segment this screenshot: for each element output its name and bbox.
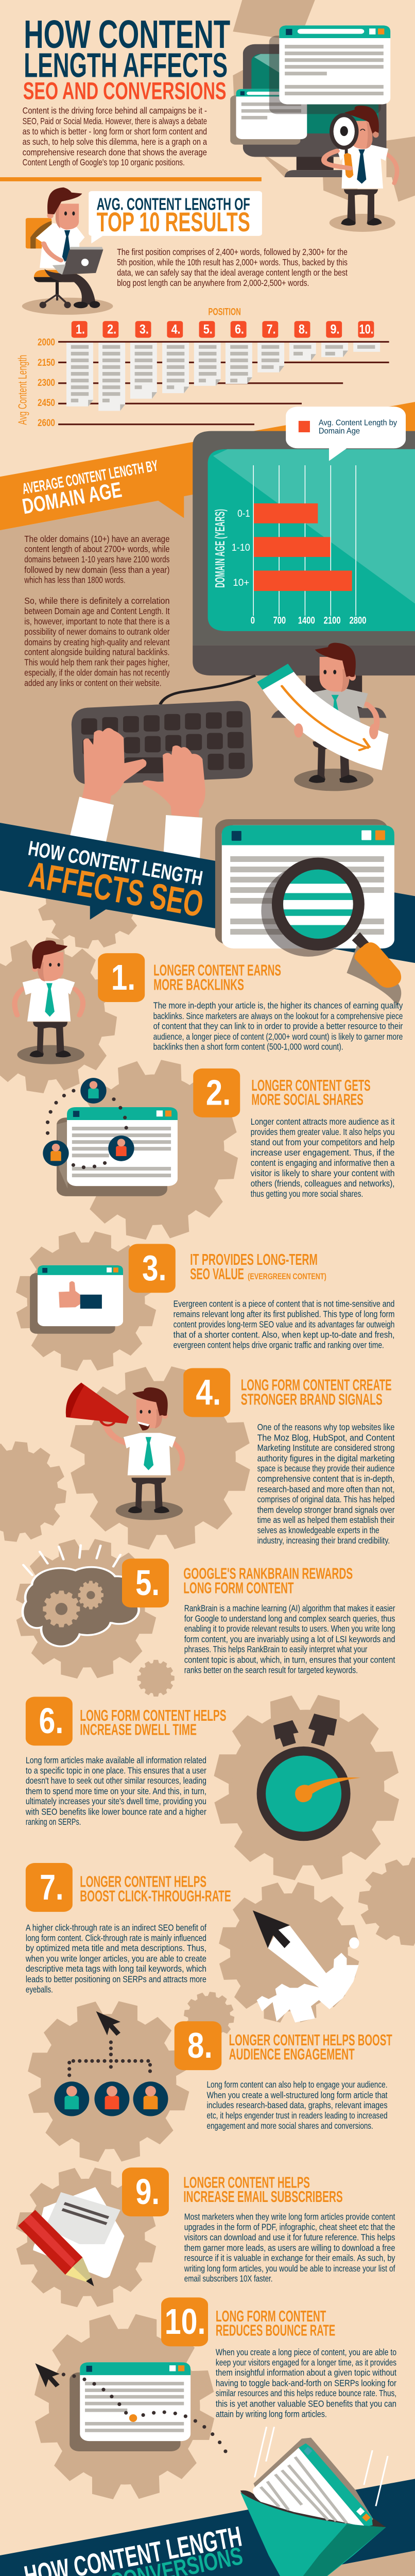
text 3 [174,1299,394,1350]
text 6 [25,1755,206,1827]
speech bubble heading: TOP 10 RESULTS [97,207,250,237]
domain age text: content alongside building natural backlinks. [24,647,169,657]
domain age bar chart: 1-10 [232,542,250,553]
domain age bar chart [232,465,366,626]
title: HOW CONTENT [24,12,230,56]
standing man [15,940,84,1064]
domain age text: domains by creating high-quality and relevant [24,637,170,648]
section: SEO items 6 and 7: BOOST CLICK-THROUGH-RATE [80,1888,231,1905]
intro text: Content is the driving force behind all campaigns be it - [23,106,207,116]
text 7: when you write longer articles, you are able to create [25,1954,206,1964]
text 4 [257,1422,395,1546]
item 1 [98,953,403,1052]
man holding scroll with arrow [257,643,389,791]
item 3 illustration: thumbs up window [30,1265,123,1334]
item 2 [193,1069,395,1199]
item 3 [129,1244,394,1350]
domain age bar chart: 0-1 [237,508,250,519]
item 2 illustration: shared window [43,1078,178,1196]
text 2 [251,1117,395,1199]
heading 5 [183,1565,353,1597]
badge 9 [122,2167,169,2216]
intro text: SEO, Paid or Social Media. However, there is always a debate [23,116,207,126]
heading: how content length affects SEO: HOW CONTENT LENGTH [26,837,204,890]
text 7 [25,1923,206,1995]
chart axis labels: 2300 [38,377,55,388]
intro text [23,106,207,167]
gear behind cursor [204,1867,374,2038]
domain age bar chart: 0 [251,615,255,626]
badge 5 [122,1558,169,1607]
chart axis labels [38,336,55,429]
text 6: Long form articles make available all information related [26,1755,206,1766]
envelope and pencil [18,2187,125,2286]
man with magnifying glass [324,106,397,232]
position badges: 5. [203,323,213,337]
chart axis labels: 2450 [38,397,55,408]
domain age text: possibility of newer domains to outrank older [24,627,170,637]
chart y axis label: Avg Content Length [15,355,29,425]
man with laptop on chair [22,188,113,315]
heading 5: LONG FORM CONTENT [183,1580,294,1597]
item 1: LONGER CONTENT EARNS [153,962,281,979]
heading: average content length by domain age: AVERAGE CONTENT LENGTH BY [21,457,159,498]
item 7 [25,1863,231,1995]
position badges: 9. [331,323,340,337]
gear behind megaphone man [51,1347,269,1569]
tan background band [0,453,415,897]
intro text: comprehensive research done that shows the average [23,147,207,158]
badge 4: 4. [196,1372,221,1413]
section: keyboard and SEO banner [0,643,415,1006]
speech bubble heading: AVG. CONTENT LENGTH OF [97,195,250,214]
gear left [0,1437,71,1547]
chart grid lines [58,341,389,425]
navy banner [0,2479,415,2576]
gear behind item 3 [1,1216,171,1386]
text 7: by optimized meta title and meta descriptions. Thus, [26,1943,206,1954]
item 5 [122,1558,395,1675]
heading 1: MORE BACKLINKS [153,976,244,993]
section: SEO items 6 and 7 [25,1660,415,2038]
badge 3 [129,1244,176,1293]
domain age bar chart: 10+ [233,577,249,588]
domain age text [24,534,170,688]
item 4 [183,1368,395,1546]
text 7: long form content. Click-through rate is mainly influenced [26,1933,206,1943]
position badges: 3. [140,323,149,337]
badge 1: 1. [111,958,135,997]
heading 4 [241,1377,392,1408]
position badges [72,321,374,338]
heading 3: SEO VALUE [190,1265,244,1283]
text 6: with SEO benefits like lower bounce rate and a higher [25,1807,206,1817]
badge 6: 6. [39,1701,63,1741]
badge 2 [193,1069,240,1117]
audience tree [54,2011,168,2116]
heading: how content length affects SEO: AFFECTS SEO [26,854,206,925]
chart axis labels: 2000 [38,336,55,348]
badge 8 [175,2021,221,2070]
text 6: to a specific topic in one place. This ensures that a user [26,1766,206,1776]
badge 8: 8. [187,2026,213,2066]
gear behind envelope [1,2153,171,2322]
bounce window [35,2362,228,2453]
badge 4 [183,1368,230,1417]
text 7: descriptive meta tags with long tail keywords, which [26,1964,206,1974]
gear behind man [0,928,126,1103]
heading 7 [80,1873,231,1905]
heading: how content length affects SEO [26,837,206,925]
heading: average content length by domain age: DOMAIN AGE [21,477,124,518]
heading: how content length affects conversions [21,2520,245,2576]
title: SEO AND CONVERSIONS [23,77,226,105]
text 9 [184,2212,395,2284]
legend bubble: Domain Age [319,426,360,435]
item 8 [175,2021,392,2131]
badge 7 [26,1863,73,1912]
domain age bar chart: 700 [273,615,286,626]
badge 2: 2. [206,1073,231,1113]
section: SEO items 4 and 5 [0,1347,395,1693]
tan background band [0,2551,415,2576]
item 6 [25,1697,226,1827]
monitor illustration with browser windows [230,25,390,177]
gear behind window [15,2294,233,2519]
small gear behind item 8 [181,1989,237,2044]
badge 10 [161,2297,208,2346]
domain age text: content length of about 2700+ words, while [24,544,169,554]
speech bubble heading [89,191,262,244]
text 6: them to spend more time on your site. And this, in turn, [26,1786,206,1797]
gear behind stopwatch [194,1675,415,1900]
document dropping into funnel [240,2437,386,2576]
domain age bar chart: 2800 [350,615,366,626]
gear behind audience [11,1984,206,2179]
keyboard cable [160,675,255,704]
section: intro and top 10 results [0,0,415,317]
badge 6 [26,1697,73,1745]
badge 7: 7. [40,1868,63,1907]
section: SEO items 6 and 7: LONG FORM CONTENT HELPS [80,1707,226,1724]
title: LENGTH AFFECTS [24,46,228,84]
orange ribbon [0,402,415,530]
domain age text: The older domains (10+) have an average [24,534,169,544]
domain age text: between Domain age and Content Length. It [24,606,170,616]
position badges: 7. [267,323,276,337]
motion lines [254,2427,388,2506]
heading 6: INCREASE DWELL TIME [80,1721,197,1739]
monitor stand behind man [271,675,386,718]
text 6: ultimately increases your site's dwell time, providing you [26,1797,206,1806]
item 10 [161,2297,396,2419]
position axis label: POSITION [209,306,241,317]
chart axis labels: 2150 [38,357,55,368]
hands typing [70,728,205,859]
text 1 [153,1001,403,1052]
intro text: as such, to help solve this dilemma, here is a graph on a [23,137,207,147]
top 10 description [117,247,348,288]
domain age bar chart: 1400 [298,615,315,626]
section: SEO items 8 and 9 [1,1910,395,2322]
intro text: as to which is better - long form or short form content and [23,126,207,137]
text 7: A higher click-through rate is an indirect SEO benefit of [26,1923,206,1933]
text 5 [184,1603,395,1675]
badge 9: 9. [135,2172,160,2212]
heading 8 [229,2031,392,2063]
domain age text: which has less than 1800 words. [24,575,126,585]
heading 6 [80,1707,226,1739]
background gear behind monitor [233,0,415,201]
browser window and magnifier [215,819,401,1006]
position badges: 2. [107,323,116,337]
heading 3 [190,1251,326,1283]
heading 2 [251,1077,371,1109]
domain age text: is, however, important to note that there is a [24,616,170,626]
heading 9 [183,2174,343,2206]
paper bars chart [66,343,380,411]
heading 3: (EVERGREEN CONTENT) [248,1272,326,1281]
gear at right edge [353,1854,415,1950]
cursor with white hand shape [253,1910,359,2023]
man with megaphone [66,1383,183,1520]
section: SEO items 1 to 3 [0,928,403,1386]
intro text: Content Length of Google's top 10 organic positions. [23,158,185,167]
gear behind item 2 [54,1043,253,1256]
badge 1 [98,953,145,1002]
text 9: email subscribers 10X faster. [184,2274,272,2284]
orange divider [0,177,262,181]
position badges: 6. [235,323,244,337]
domain age text: especially, if the older domain has not recently [24,668,170,678]
badge 3: 3. [142,1248,166,1289]
position badges: 8. [299,323,308,337]
position badges: 4. [171,323,181,337]
text 7: eyeballs. [26,1985,53,1995]
small gear [137,1660,175,1697]
brain with gears [23,1545,137,1646]
navy banner [0,823,415,963]
text 10: attain by writing long form articles. [216,2409,327,2419]
tablet frame [193,431,415,675]
stopwatch [257,1714,360,1841]
legend bubble [286,406,406,461]
chart axis labels: 2600 [38,417,55,429]
heading 10 [216,2308,335,2340]
heading 1 [153,962,281,993]
text 7: leads to better positioning on SERPs and attracts more [26,1974,206,1985]
position badges: 10. [359,323,373,337]
text 6: ranking on SERPs. [26,1817,81,1827]
section: SEO item 10 and conversions banner [0,2294,415,2576]
badge 5: 5. [135,1563,160,1603]
domain age text: domains between 1-10 years have 2100 words [24,554,169,565]
small gear under banner [28,839,154,957]
domain age text: followed by new domain (less than a year) [24,565,169,575]
text 8 [206,2080,388,2131]
gear behind brain [1,1524,171,1693]
keyboard [72,701,253,785]
domain age text: This would help them rank their pages higher, [24,657,169,668]
item 9 [122,2167,395,2284]
heading 7: LONGER CONTENT HELPS [80,1873,206,1891]
domain age text: added any links or content on their website. [24,678,162,688]
text 10 [216,2347,396,2419]
position badges: 1. [76,323,85,337]
title [23,12,230,105]
text 6: doesn't have to seek out other similar resources, leading [26,1776,206,1786]
domain age axis label: DOMAIN AGE (YEARS) [212,509,228,588]
section: paper chart and domain age [0,321,415,897]
domain age bar chart: 2100 [324,615,341,626]
domain age text: So, while there is definitely a correlation [24,596,169,606]
badge 10: 10. [165,2302,205,2342]
